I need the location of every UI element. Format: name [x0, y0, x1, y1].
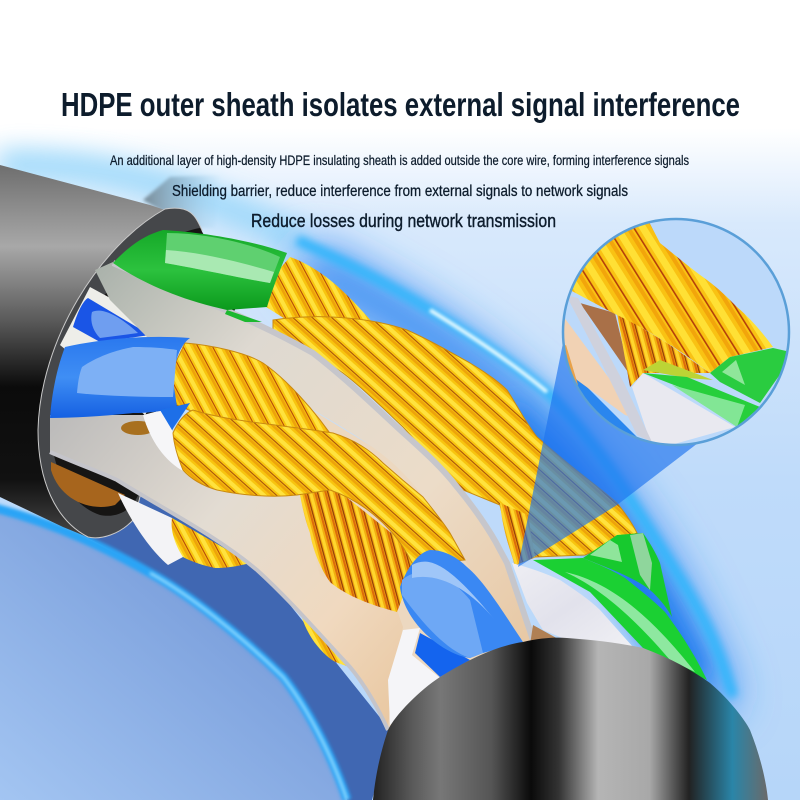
rope: under strand: [300, 480, 415, 612]
funnel callout: [518, 343, 698, 567]
rope: small lower piece: [300, 608, 350, 667]
rope: lower left: [172, 518, 250, 568]
upper sheath band: [95, 262, 537, 650]
description line 2: Shielding barrier, reduce interference from external signals to network signals: [172, 183, 628, 200]
rope: top strand behind green: [263, 257, 372, 322]
light arcs: [0, 240, 733, 800]
blue wire front: [50, 337, 190, 430]
green wire top: [113, 230, 287, 322]
blue wire rear: [73, 298, 150, 342]
tan gap: [530, 625, 560, 645]
rope: deep orange strand behind: [350, 378, 550, 510]
rope: lower back strand: [500, 503, 535, 565]
white wrap under blue: [143, 408, 185, 472]
black cable: bottom right end: [373, 638, 768, 800]
rope: upper blue strand: [171, 343, 338, 445]
green wire: lower right: [533, 533, 707, 680]
cable interior: [50, 228, 240, 516]
lower white wire and rope: [118, 493, 250, 568]
base interior fill: [200, 360, 530, 730]
copper oval: [121, 421, 155, 435]
lower sheath band: [50, 415, 403, 730]
blue wire: bottom centre: [400, 550, 523, 677]
white inner separator: [60, 287, 190, 415]
description line 3: Reduce losses during network transmission: [251, 211, 556, 231]
inset magnifier: [555, 218, 795, 450]
black cable: left end: [0, 165, 202, 538]
copper core interior: [51, 462, 125, 507]
cable opening rim: [38, 208, 202, 538]
rope: long back rope: [273, 317, 637, 565]
white insulator: lower right: [512, 563, 633, 647]
white wire: bottom centre: [388, 628, 440, 725]
rope: lower front strand: [173, 410, 465, 565]
